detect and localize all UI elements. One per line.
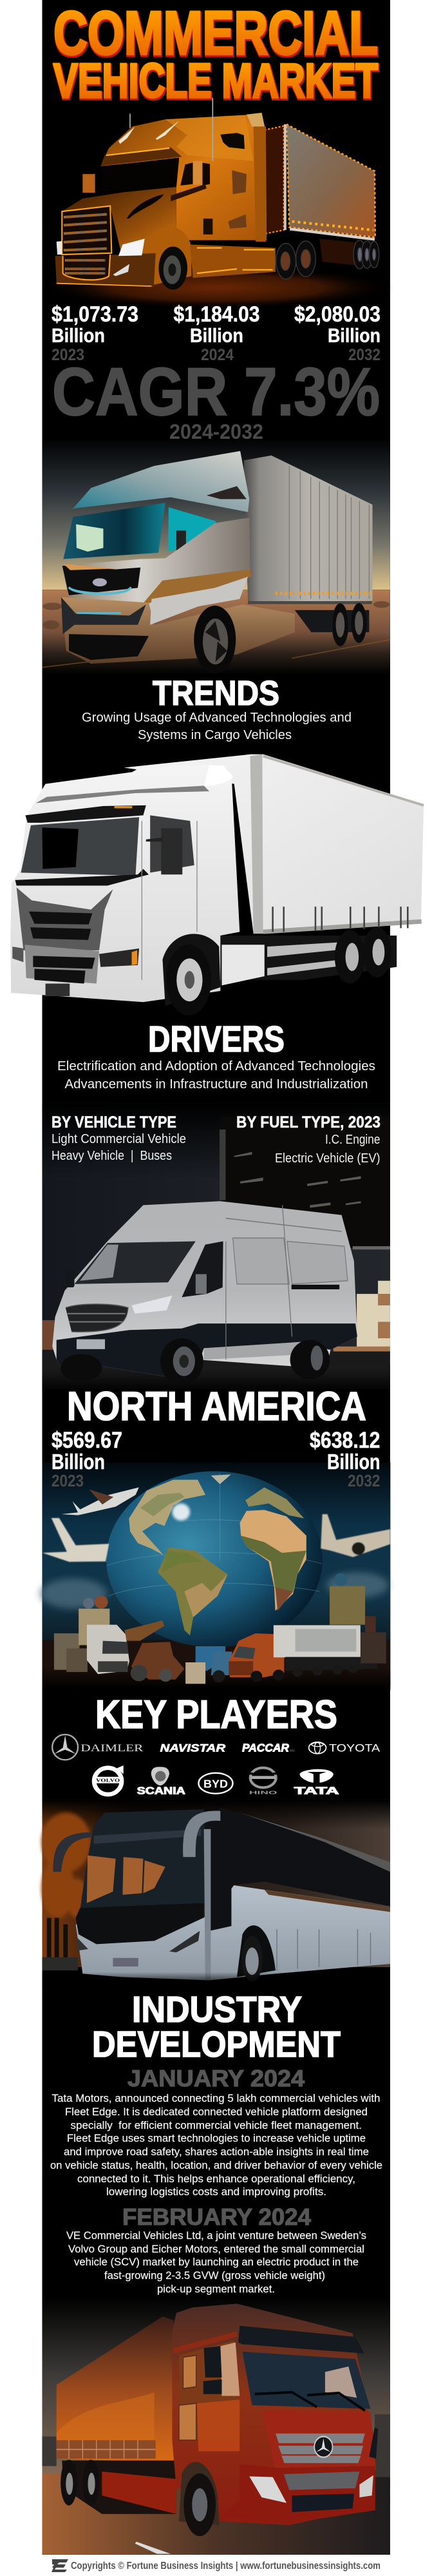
windshield: [63, 503, 165, 559]
headlights: [169, 1931, 200, 1952]
heading: by fuel type: BY FUEL TYPE, 2023: [236, 1113, 380, 1131]
january text: Fleet Edge uses smart technologies to increase vehicle uptime: [67, 2132, 366, 2144]
road: [42, 640, 390, 668]
segment: by vehicle type: [52, 1113, 186, 1163]
stat 2032: Billion: [328, 324, 380, 347]
wheel: [194, 606, 236, 674]
january text: connected to it. This helps enhance operational efficiency,: [77, 2173, 355, 2185]
logo: volvo: [92, 1765, 124, 1794]
trailer: [244, 456, 373, 602]
plane left blurred: [42, 1518, 109, 1562]
box: [57, 2316, 174, 2463]
logo: daimler: [52, 1735, 144, 1760]
image: van in warehouse: [42, 1103, 390, 1392]
trends text: Systems in Cargo Vehicles: [138, 728, 292, 742]
february text: [66, 2229, 366, 2295]
hood: [62, 187, 176, 253]
fuel type line 2: Electric Vehicle (EV): [275, 1151, 380, 1166]
drivers text: [57, 1059, 375, 1091]
image: futuristic truck: [42, 440, 390, 675]
stat NA 2032: 2032: [348, 1471, 380, 1490]
bumper: [55, 253, 156, 287]
logo: tata: [294, 1769, 339, 1796]
heading: industry development: [92, 1989, 341, 2065]
rear wheels: [276, 240, 379, 279]
subheading: january 2024: JANUARY 2024: [127, 2065, 305, 2091]
stat 2024: [174, 302, 260, 364]
stat 2023: Billion: [52, 324, 105, 347]
logo: byd: [198, 1773, 232, 1794]
rear axle: [295, 610, 369, 632]
africa and europe: [240, 1510, 306, 1611]
mirror: [66, 1271, 75, 1287]
stat 2023: $1,073.73: [52, 302, 138, 327]
january text: on vehicle status, health, location, and driver behavior of every vehicle: [50, 2159, 382, 2171]
logo: toyota: TOYOTA: [329, 1742, 380, 1754]
boxes: [333, 1281, 390, 1365]
stats: north america: [52, 1428, 380, 1490]
lower body: [61, 597, 295, 664]
side window: [182, 1242, 223, 1297]
heading: key players: KEY PLAYERS: [95, 1693, 337, 1737]
stat NA 2023: Billion: [52, 1450, 105, 1474]
machinery: [124, 1620, 232, 1684]
trends text: [82, 711, 352, 742]
roof: [72, 451, 249, 512]
stat 2023: 2023: [52, 346, 84, 364]
logo: toyota: [309, 1742, 380, 1754]
heading: drivers: DRIVERS: [148, 1019, 285, 1060]
stat NA 2023: [52, 1428, 122, 1490]
mirrors: [53, 1832, 91, 1872]
upper windows: [203, 1808, 390, 1921]
heading: industry development: DEVELOPMENT: [92, 2024, 341, 2065]
heading: by vehicle type: BY VEHICLE TYPE: [52, 1113, 176, 1131]
door: [208, 1859, 231, 1931]
stat 2024: Billion: [190, 324, 243, 347]
logo: daimler: DAIMLER: [80, 1742, 144, 1754]
wheels: [61, 1354, 102, 1381]
stat 2032: [294, 302, 380, 364]
fuel type line 1: I.C. Engine: [325, 1133, 380, 1147]
heading: trends: TRENDS: [153, 674, 279, 713]
february text: vehicle (SCV) market by launching an electric product in the: [74, 2256, 359, 2268]
flatbed trailer: [274, 1625, 377, 1677]
CAGR: CAGR 7.3%: [52, 354, 380, 430]
subheading: february 2024: FEBRUARY 2024: [122, 2204, 311, 2230]
side window: [168, 507, 216, 552]
logo: tata: TATA: [294, 1786, 339, 1796]
red truck: [229, 1633, 285, 1682]
globe: [106, 1471, 323, 1648]
logo: hino: HINO: [249, 1789, 277, 1795]
stat 2023: [52, 302, 138, 364]
cab side: [172, 2303, 375, 2525]
drivers text: Electrification and Adoption of Advanced Technologies: [57, 1059, 375, 1073]
plane right blurred: [321, 1514, 390, 1557]
bumper: [220, 2464, 375, 2523]
february text: VE Commercial Vehicles Ltd, a joint venture between Sweden’s: [66, 2229, 366, 2242]
stats: market size: [52, 302, 380, 364]
vehicle types line 2: Heavy Vehicle | Buses: [52, 1149, 172, 1163]
cab front: [238, 2326, 364, 2354]
arch and wheel: [162, 934, 220, 1006]
cab: [10, 765, 239, 1002]
january text: specially for efficient commercial vehicle fleet management.: [71, 2119, 362, 2131]
logo: scania: [137, 1767, 185, 1796]
logo: paccar: inc: [290, 1749, 295, 1753]
windshield: [97, 158, 179, 192]
north america: [129, 1480, 205, 1555]
image: orange truck: [41, 98, 394, 309]
bus body lower: [76, 1885, 390, 1980]
footer: [42, 2555, 390, 2576]
plane left top: [61, 1487, 139, 1515]
CAGR period: 2024-2032: [169, 420, 263, 443]
sun visor: [100, 148, 182, 166]
stat NA 2023: 2023: [52, 1471, 84, 1490]
van body: [52, 1201, 357, 1381]
cab: [100, 113, 267, 240]
drivers text: Advancements in Infrastructure and Industrialization: [64, 1077, 368, 1091]
dash: [76, 1903, 204, 1944]
image: coach bus: [41, 1800, 390, 1987]
wheel: [237, 1925, 276, 1977]
windshield: [75, 1242, 196, 1284]
logo: hino: [249, 1768, 277, 1795]
panels: [233, 1238, 348, 1284]
windshield: [80, 1809, 208, 1911]
stat 2024: 2024: [201, 346, 234, 364]
grille: [66, 1304, 128, 1332]
grille: [276, 2434, 365, 2463]
stat NA 2032: [310, 1428, 380, 1490]
stat 2032: $2,080.03: [294, 302, 380, 327]
february text: pick-up segment market.: [157, 2283, 275, 2295]
logo: navistar: NAVISTAR: [160, 1742, 226, 1754]
black panel: [42, 0, 390, 2555]
luggage panels: [277, 1929, 371, 1970]
box body: [124, 755, 424, 934]
february text: Volvo Group and Eicher Motors, entered the small commercial: [68, 2243, 364, 2255]
segment: by fuel type: [236, 1113, 380, 1166]
grille: [17, 887, 113, 950]
logo: scania: SCANIA: [137, 1786, 185, 1796]
title: [53, 0, 378, 108]
footer logo: [52, 2559, 68, 2572]
containers left: [54, 1596, 109, 1672]
logo: volvo: VOLVO: [96, 1778, 120, 1783]
windshield: [21, 817, 139, 876]
chassis: [220, 936, 397, 980]
stat 2032: 2032: [348, 346, 380, 364]
chassis: [62, 2461, 176, 2514]
january text: Tata Motors, announced connecting 5 lakh commercial vehicles with: [52, 2092, 380, 2104]
logo: paccar: PACCAR: [242, 1742, 289, 1754]
body: [62, 517, 250, 614]
grille: [62, 206, 111, 255]
logos: [52, 1735, 380, 1796]
january text: [50, 2092, 382, 2198]
heading: north america: NORTH AMERICA: [67, 1384, 366, 1429]
vehicle types line 1: Light Commercial Vehicle: [52, 1132, 186, 1146]
logo: byd: BYD: [203, 1777, 228, 1790]
trends text: Growing Usage of Advanced Technologies and: [82, 711, 352, 725]
lower body: [121, 227, 191, 285]
white truck: [87, 1625, 129, 1674]
stat NA 2023: $569.67: [52, 1428, 122, 1453]
january text: and improve road safety, shares action-able insights in real time: [64, 2146, 369, 2158]
front wheel: [158, 247, 187, 290]
stat NA 2032: Billion: [327, 1450, 380, 1474]
trailer: [265, 124, 377, 267]
stat 2024: $1,184.03: [174, 302, 260, 327]
january text: Fleet Edge. It is dedicated connected vehicle platform designed: [65, 2106, 368, 2118]
stat NA 2032: $638.12: [310, 1428, 380, 1453]
heading: industry development: INDUSTRY: [132, 1989, 302, 2030]
front panel: [262, 2410, 376, 2470]
image: white truck: [10, 755, 424, 1015]
image: globe with vehicles: [41, 1463, 390, 1690]
side window: [150, 815, 194, 872]
wheel: [179, 2462, 219, 2525]
january text: lowering logistics costs and improving profits.: [106, 2186, 326, 2198]
south america: [158, 1548, 228, 1635]
containers right: [330, 1573, 386, 1664]
february text: fast-growing 2-3.5 GVW (gross vehicle weight): [104, 2269, 325, 2282]
image: red truck: [42, 2296, 390, 2555]
